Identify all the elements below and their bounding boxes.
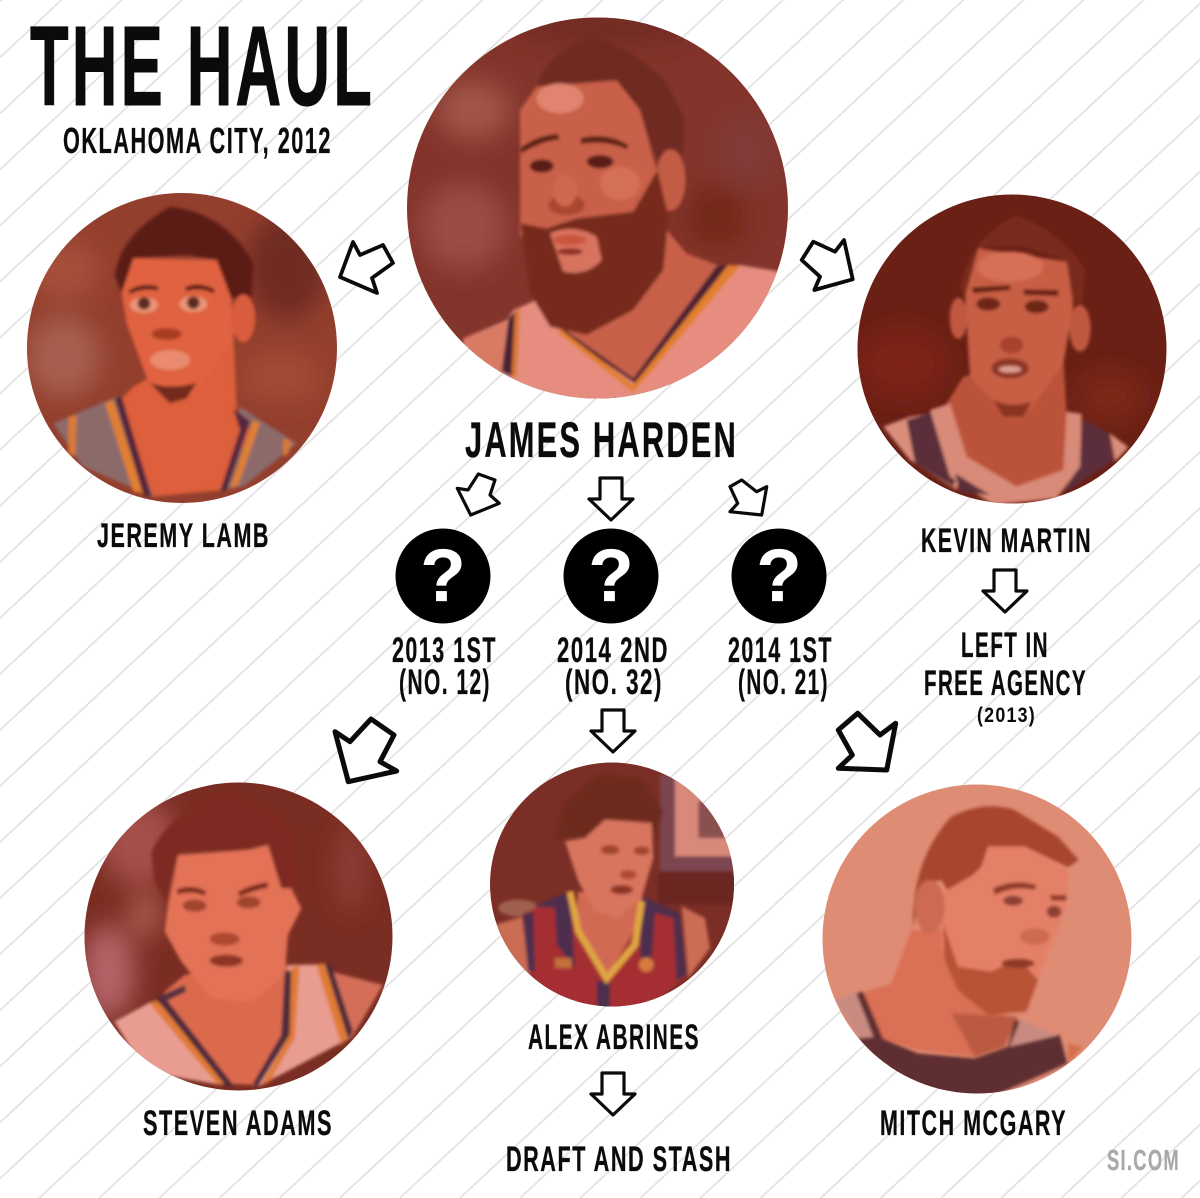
icon: unknown pick 2 <box>564 528 658 624</box>
portrait: James Harden <box>400 10 800 410</box>
arrow: Harden to 2014 second-round pick <box>589 478 633 520</box>
label: left in free agency: (2013) <box>977 704 1036 727</box>
arrow: Harden to Lamb <box>340 242 393 293</box>
label: 2014 first-round pick <box>728 631 833 702</box>
portrait: Mitch McGary <box>818 780 1138 1100</box>
subtitle: OKLAHOMA CITY, 2012 <box>63 120 332 161</box>
portrait: Steven Adams <box>78 775 398 1095</box>
label: left in free agency: LEFT IN <box>961 626 1049 665</box>
label: 2013 first-round pick <box>392 631 497 702</box>
label: left in free agency <box>924 626 1087 727</box>
arrow: 2014 first-round pick to McGary <box>838 713 896 770</box>
icon: unknown pick 1 <box>396 528 490 624</box>
portrait: Alex Abrines <box>485 758 740 1013</box>
label: Alex Abrines: ALEX ABRINES <box>528 1018 700 1057</box>
arrow: Abrines to draft and stash <box>591 1073 635 1115</box>
arrow: Harden to 2014 first-round pick <box>730 480 767 515</box>
arrow: Harden to 2013 pick <box>457 474 499 515</box>
label: James Harden: JAMES HARDEN <box>465 412 738 468</box>
arrow: Harden to Martin <box>802 240 853 290</box>
label: 2014 second-round pick: (NO. 32) <box>565 663 663 702</box>
icon: unknown pick 3: ? <box>756 534 802 617</box>
label: 2014 first-round pick: 2014 1ST <box>728 631 833 670</box>
arrow: 2013 pick to Adams <box>335 719 397 782</box>
arrow: 2014 second-round pick to Abrines <box>591 710 635 752</box>
label: left in free agency: FREE AGENCY <box>924 664 1087 703</box>
icon: unknown pick 2: ? <box>588 534 634 617</box>
title: THE HAUL <box>30 3 375 129</box>
label: Steven Adams: STEVEN ADAMS <box>143 1104 333 1143</box>
label: Jeremy Lamb: JEREMY LAMB <box>97 517 270 555</box>
icon: unknown pick 3 <box>732 528 826 624</box>
arrow: Martin to free agency <box>983 570 1027 612</box>
label: 2014 second-round pick <box>557 631 669 702</box>
label: 2014 second-round pick: 2014 2ND <box>557 631 669 670</box>
label: Mitch McGary: MITCH MCGARY <box>880 1104 1067 1143</box>
label: 2013 first-round pick: 2013 1ST <box>392 631 497 670</box>
label: 2013 first-round pick: (NO. 12) <box>399 663 491 702</box>
portrait: Jeremy Lamb <box>20 190 350 510</box>
portrait: Kevin Martin <box>850 190 1180 510</box>
label: Kevin Martin: KEVIN MARTIN <box>921 522 1092 560</box>
icon: unknown pick 1: ? <box>420 534 466 617</box>
label: draft and stash: DRAFT AND STASH <box>506 1140 732 1179</box>
label: 2014 first-round pick: (NO. 21) <box>738 663 829 702</box>
